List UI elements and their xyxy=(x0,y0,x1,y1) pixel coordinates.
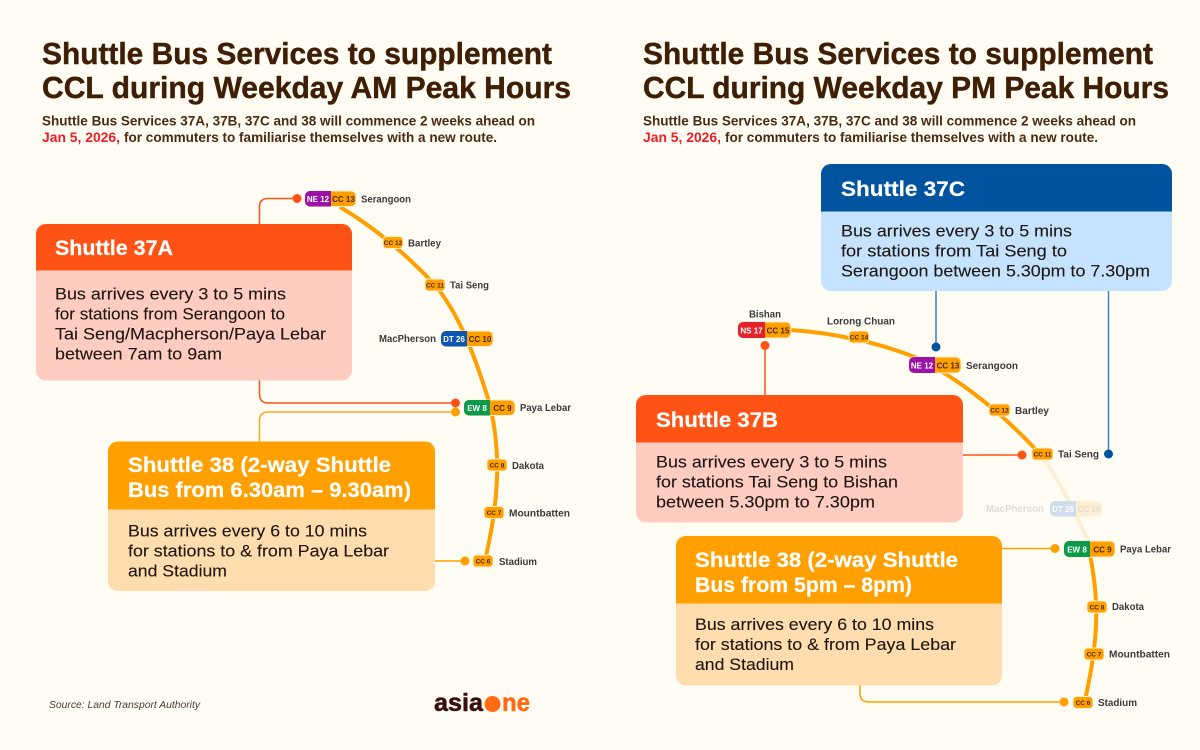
station: MacPherson: CC 10 xyxy=(469,335,492,344)
connector: 37C to Tai Seng xyxy=(1104,290,1113,458)
station: Mountbatten: CC 7 xyxy=(487,510,502,517)
station: Paya Lebar: Paya Lebar xyxy=(520,403,571,414)
left subtitle: Shuttle Bus Services 37A, 37B, 37C and 38 will commence 2 weeks ahead on xyxy=(42,112,535,128)
station: Bartley: Bartley xyxy=(408,238,441,250)
panel: Shuttle 38 AM: and Stadium xyxy=(128,562,227,580)
station: Mountbatten: CC 7 xyxy=(1087,652,1102,658)
station: Tai Seng xyxy=(1032,448,1099,460)
panel: Shuttle 37C xyxy=(821,164,1172,291)
station: Serangoon: CC 13 xyxy=(332,195,355,204)
station: MacPherson (faded): MacPherson xyxy=(986,504,1044,515)
PM route: lower section xyxy=(1085,555,1096,700)
station: Paya Lebar: CC 9 xyxy=(493,404,512,413)
station: Stadium: Stadium xyxy=(499,557,537,568)
connector: 37B to Bishan xyxy=(760,341,770,396)
left subtitle xyxy=(42,112,535,145)
station: Bartley xyxy=(383,236,441,250)
panel: Shuttle 37C: Bus arrives every 3 to 5 mins xyxy=(841,222,1072,240)
station: Serangoon: NE 12 xyxy=(911,362,934,370)
station: Bishan: CC 15 xyxy=(767,326,790,336)
panel: Shuttle 37C: Shuttle 37C xyxy=(841,178,965,201)
station: Bishan: Bishan xyxy=(749,310,781,320)
station: Stadium xyxy=(1073,696,1137,709)
panel: Shuttle 37A: between 7am to 9am xyxy=(55,346,222,364)
station: Paya Lebar: EW 8 xyxy=(1067,546,1087,554)
panel: Shuttle 37A: for stations from Serangoon to xyxy=(55,306,285,324)
station: Bartley: CC 12 xyxy=(990,408,1009,414)
left title: CCL during Weekday AM Peak Hours xyxy=(42,70,571,105)
left panel: AM peak xyxy=(36,36,571,717)
panel: Shuttle 37A: Bus arrives every 3 to 5 mins xyxy=(55,286,286,304)
connector: 38 to Stadium xyxy=(860,684,1068,706)
right title: CCL during Weekday PM Peak Hours xyxy=(643,70,1169,105)
station: MacPherson (faded): DT 26 xyxy=(1052,505,1074,514)
station: Dakota: Dakota xyxy=(512,461,544,472)
left title: Shuttle Bus Services to supplement xyxy=(42,36,552,71)
panel: Shuttle 37A: Shuttle 37A xyxy=(55,237,173,260)
panel: Shuttle 38 PM: and Stadium xyxy=(695,656,794,674)
station: Tai Seng: Tai Seng xyxy=(1058,450,1099,460)
station: Serangoon: Serangoon xyxy=(966,361,1018,372)
left title xyxy=(42,36,571,105)
station: Stadium: CC 6 xyxy=(1076,700,1091,707)
station: Lorong Chuan: Lorong Chuan xyxy=(827,316,895,328)
panel: Shuttle 37B: for stations Tai Seng to Bishan xyxy=(656,474,898,492)
logo: asiaone: asia xyxy=(434,689,484,717)
panel: Shuttle 37A xyxy=(36,224,352,380)
PM Circle Line route xyxy=(791,330,1040,454)
right title xyxy=(643,36,1169,105)
panel: Shuttle 38 AM: Bus from 6.30am – 9.30am) xyxy=(128,479,411,502)
station: MacPherson: DT 26 xyxy=(443,335,465,344)
station: Tai Seng xyxy=(425,279,489,292)
station: Serangoon: CC 13 xyxy=(937,362,960,370)
station: MacPherson: MacPherson xyxy=(379,334,436,345)
station: MacPherson (faded) xyxy=(986,501,1102,516)
panel: Shuttle 37B: Shuttle 37B xyxy=(656,409,778,432)
panel: Shuttle 38 AM: Bus arrives every 6 to 10 mins xyxy=(128,522,367,540)
station: Serangoon: NE 12 xyxy=(307,195,330,204)
panel: Shuttle 37B: between 5.30pm to 7.30pm xyxy=(656,494,875,512)
connector: 37A to Paya Lebar xyxy=(260,378,460,408)
connector: 37A to Serangoon xyxy=(260,194,302,226)
station: Paya Lebar: EW 8 xyxy=(467,404,487,413)
station: Serangoon xyxy=(909,357,1018,373)
station: Mountbatten: Mountbatten xyxy=(509,508,570,520)
panel: Shuttle 38 PM: Bus arrives every 6 to 10 mins xyxy=(695,616,934,634)
panel: Shuttle 37C: Serangoon between 5.30pm to 7.30pm xyxy=(841,262,1150,280)
station: Stadium: Stadium xyxy=(1098,698,1137,709)
PM route: faded section xyxy=(1040,454,1090,545)
station: Stadium xyxy=(473,555,537,568)
station: MacPherson (faded): CC 10 xyxy=(1078,505,1101,514)
station: Mountbatten: Mountbatten xyxy=(1109,650,1170,660)
logo: asiaone: ne xyxy=(502,689,530,717)
station: MacPherson xyxy=(379,331,493,346)
station: Paya Lebar: Paya Lebar xyxy=(1120,544,1171,556)
AM Circle Line route xyxy=(340,207,497,556)
station: Tai Seng: Tai Seng xyxy=(450,280,489,292)
right subtitle: Shuttle Bus Services 37A, 37B, 37C and 38 will commence 2 weeks ahead on xyxy=(643,112,1136,128)
station: Dakota xyxy=(1087,601,1144,613)
panel: Shuttle 37A: Tai Seng/Macpherson/Paya Lebar xyxy=(55,326,327,344)
station: Tai Seng: CC 11 xyxy=(1033,452,1052,458)
station: Serangoon xyxy=(305,191,411,206)
left subtitle: for commuters to familiarise themselves with a new route. xyxy=(124,129,497,145)
station: Paya Lebar: CC 9 xyxy=(1093,546,1112,554)
left subtitle: Jan 5, 2026, xyxy=(42,129,120,145)
panel: Shuttle 38 AM: Shuttle 38 (2-way Shuttle xyxy=(128,454,391,477)
station: Bishan xyxy=(738,310,791,338)
right subtitle xyxy=(643,112,1136,145)
connector: 37C to Serangoon xyxy=(932,290,940,352)
station: Mountbatten xyxy=(1084,648,1170,660)
station: Lorong Chuan xyxy=(827,316,895,343)
station: Bartley: Bartley xyxy=(1015,406,1049,417)
station: Bartley: CC 12 xyxy=(384,240,403,247)
right subtitle: Jan 5, 2026, xyxy=(643,129,721,145)
connector: 38 to Paya Lebar xyxy=(260,408,460,443)
station: Dakota: Dakota xyxy=(1112,602,1144,613)
panel: Shuttle 38 AM: for stations to & from Paya Lebar xyxy=(128,542,390,560)
panel: Shuttle 38 PM: Bus from 5pm – 8pm) xyxy=(695,574,912,597)
station: Paya Lebar xyxy=(464,400,571,416)
source note: Source: Land Transport Authority xyxy=(49,699,201,711)
connector: 37B to Tai Seng xyxy=(961,450,1026,460)
station: Dakota: CC 8 xyxy=(1090,604,1105,612)
station: Dakota xyxy=(487,459,544,472)
connector: 38 to Stadium xyxy=(433,556,470,566)
panel: Shuttle 38 PM: Shuttle 38 (2-way Shuttle xyxy=(695,549,958,572)
panel: Shuttle 38 AM xyxy=(108,442,435,591)
right panel: PM peak xyxy=(636,36,1172,709)
station: Tai Seng: CC 11 xyxy=(426,282,444,290)
station: Bartley xyxy=(989,404,1049,417)
logo: asiaone xyxy=(434,689,530,717)
station: Paya Lebar xyxy=(1064,541,1171,557)
panel: Shuttle 38 PM xyxy=(676,536,1002,686)
station: Stadium: CC 6 xyxy=(476,558,491,566)
station: Dakota: CC 8 xyxy=(490,462,505,470)
panel: Shuttle 38 PM: for stations to & from Paya Lebar xyxy=(695,636,957,654)
station: Lorong Chuan: CC 14 xyxy=(850,334,869,342)
panel: Shuttle 37B: Bus arrives every 3 to 5 mins xyxy=(656,454,887,472)
station: Bishan: NS 17 xyxy=(740,326,763,336)
right title: Shuttle Bus Services to supplement xyxy=(643,36,1153,71)
station: Serangoon: Serangoon xyxy=(361,194,411,206)
panel: Shuttle 37C: for stations from Tai Seng to xyxy=(841,242,1067,260)
panel: Shuttle 37B xyxy=(636,395,963,522)
connector: 38 to Paya Lebar xyxy=(1000,544,1060,553)
station: Mountbatten xyxy=(484,506,570,520)
right subtitle: for commuters to familiarise themselves with a new route. xyxy=(725,129,1098,145)
